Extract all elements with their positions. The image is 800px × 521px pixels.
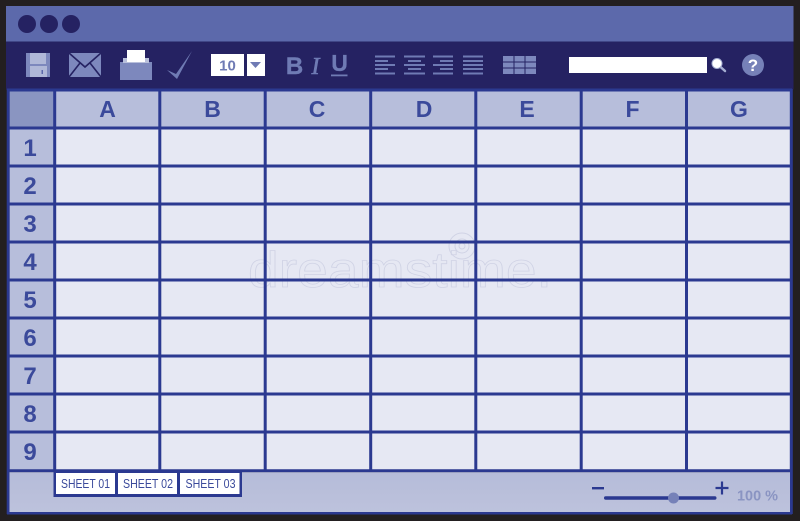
sheet tabs: SHEET 01 <box>61 477 110 491</box>
row numbers: 5 <box>23 287 37 314</box>
corner cell <box>8 90 55 128</box>
window control dots <box>18 15 80 33</box>
row header cells <box>8 128 55 471</box>
text style buttons: U <box>331 50 348 76</box>
icon: magnifier <box>712 58 725 71</box>
text style buttons: I <box>310 54 320 80</box>
column letters: D <box>416 96 432 122</box>
bottom status bar <box>7 472 792 514</box>
row numbers: 1 <box>23 135 37 162</box>
icon: save disk <box>26 53 50 77</box>
alignment buttons <box>375 56 483 74</box>
column letters: C <box>309 96 325 122</box>
row numbers: 4 <box>23 249 37 276</box>
icon: printer <box>120 50 152 80</box>
column letters: B <box>204 96 221 122</box>
row numbers <box>23 135 37 466</box>
row numbers: 2 <box>23 173 37 200</box>
text style buttons: B <box>286 53 303 80</box>
column letters: E <box>519 96 535 122</box>
row numbers: 3 <box>23 211 37 238</box>
sheet tabs: SHEET 03 <box>186 477 236 491</box>
column letters: F <box>625 96 640 122</box>
icon: envelope <box>69 53 101 77</box>
icon: help: ? <box>748 56 758 75</box>
zoom percent: 100 % <box>737 488 778 504</box>
column letters <box>99 96 748 122</box>
column letters: G <box>730 96 748 122</box>
icon: check mark <box>167 51 192 79</box>
font size box <box>211 54 265 76</box>
column letters: A <box>99 96 116 122</box>
title bar <box>6 6 794 42</box>
row numbers: 9 <box>23 439 37 466</box>
sheet tabs: SHEET 02 <box>123 477 173 491</box>
zoom slider <box>592 482 728 504</box>
watermark: dreamstime. <box>248 242 552 298</box>
column header cells <box>55 90 792 128</box>
toolbar <box>6 42 794 90</box>
icon: help <box>742 54 764 76</box>
row numbers: 6 <box>23 325 37 352</box>
text style buttons <box>286 50 348 80</box>
data cells <box>55 128 792 471</box>
row numbers: 7 <box>23 363 37 390</box>
sheet tabs <box>54 472 242 497</box>
font size box: 10 <box>219 58 236 74</box>
search box <box>569 57 707 73</box>
row numbers: 8 <box>23 401 37 428</box>
table button <box>503 56 536 74</box>
